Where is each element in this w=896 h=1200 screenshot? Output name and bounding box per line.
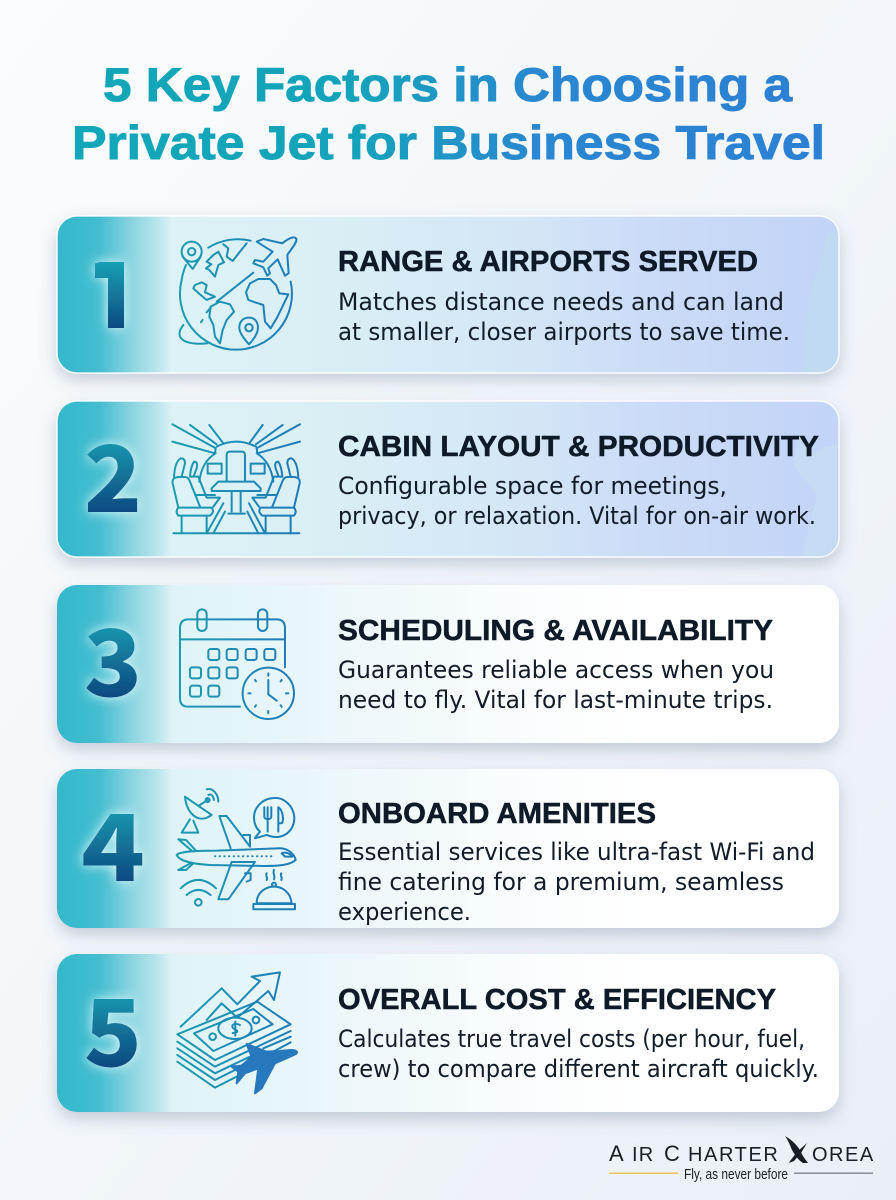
- panel: onboard amenities: [57, 769, 839, 928]
- logo: Air Charter Korea: C: [664, 1141, 680, 1166]
- heading: RANGE & AIRPORTS SERVED: [338, 246, 758, 278]
- logo: Air Charter Korea: A: [609, 1141, 624, 1166]
- description: need to fly. Vital for last-minute trips.: [338, 686, 773, 714]
- description: [338, 656, 774, 714]
- description: Guarantees reliable access when you: [338, 656, 774, 684]
- panel: cabin layout: [57, 401, 839, 557]
- description: [338, 838, 815, 926]
- panel: scheduling: [57, 585, 839, 743]
- description: privacy, or relaxation. Vital for on-air work.: [338, 502, 816, 530]
- description: crew) to compare different aircraft quickly.: [338, 1055, 819, 1083]
- icon: globe with plane: [179, 237, 296, 350]
- number 1: 1: [88, 222, 136, 355]
- icon: plane with amenities: [177, 789, 296, 909]
- description: Matches distance needs and can land: [338, 288, 784, 316]
- logo: Air Charter Korea: IR: [632, 1144, 654, 1166]
- icon: calendar and clock: [180, 609, 294, 719]
- number 2: 2: [84, 406, 142, 539]
- description: [338, 472, 816, 530]
- icon: money stack with plane: [177, 972, 297, 1093]
- number 5: 5: [84, 960, 142, 1093]
- logo: Air Charter Korea: HARTER: [688, 1144, 779, 1166]
- description: Configurable space for meetings,: [338, 472, 727, 500]
- heading: ONBOARD AMENITIES: [338, 798, 656, 830]
- panel: range and airports: [57, 216, 839, 373]
- logo: Air Charter Korea: Fly, as never before: [684, 1166, 788, 1183]
- description: experience.: [338, 898, 471, 926]
- description: [338, 1025, 819, 1083]
- description: Essential services like ultra-fast Wi-Fi and: [338, 838, 815, 866]
- heading: OVERALL COST & EFFICIENCY: [338, 984, 776, 1016]
- panel: overall cost: [57, 954, 839, 1112]
- title: 5 Key Factors in Choosing a: [103, 58, 793, 111]
- logo: Air Charter Korea: OREA: [812, 1144, 875, 1166]
- description: [338, 288, 790, 346]
- number 3: 3: [84, 590, 142, 723]
- description: fine catering for a premium, seamless: [338, 868, 784, 896]
- number 4: 4: [81, 775, 145, 908]
- description: at smaller, closer airports to save time.: [338, 318, 790, 346]
- title: [72, 58, 825, 169]
- heading: SCHEDULING & AVAILABILITY: [338, 615, 773, 647]
- icon: cabin interior: [172, 424, 300, 533]
- description: Calculates true travel costs (per hour, fuel,: [338, 1025, 805, 1053]
- logo: Air Charter Korea: [609, 1136, 875, 1183]
- heading: CABIN LAYOUT & PRODUCTIVITY: [338, 431, 819, 463]
- title: Private Jet for Business Travel: [72, 116, 825, 169]
